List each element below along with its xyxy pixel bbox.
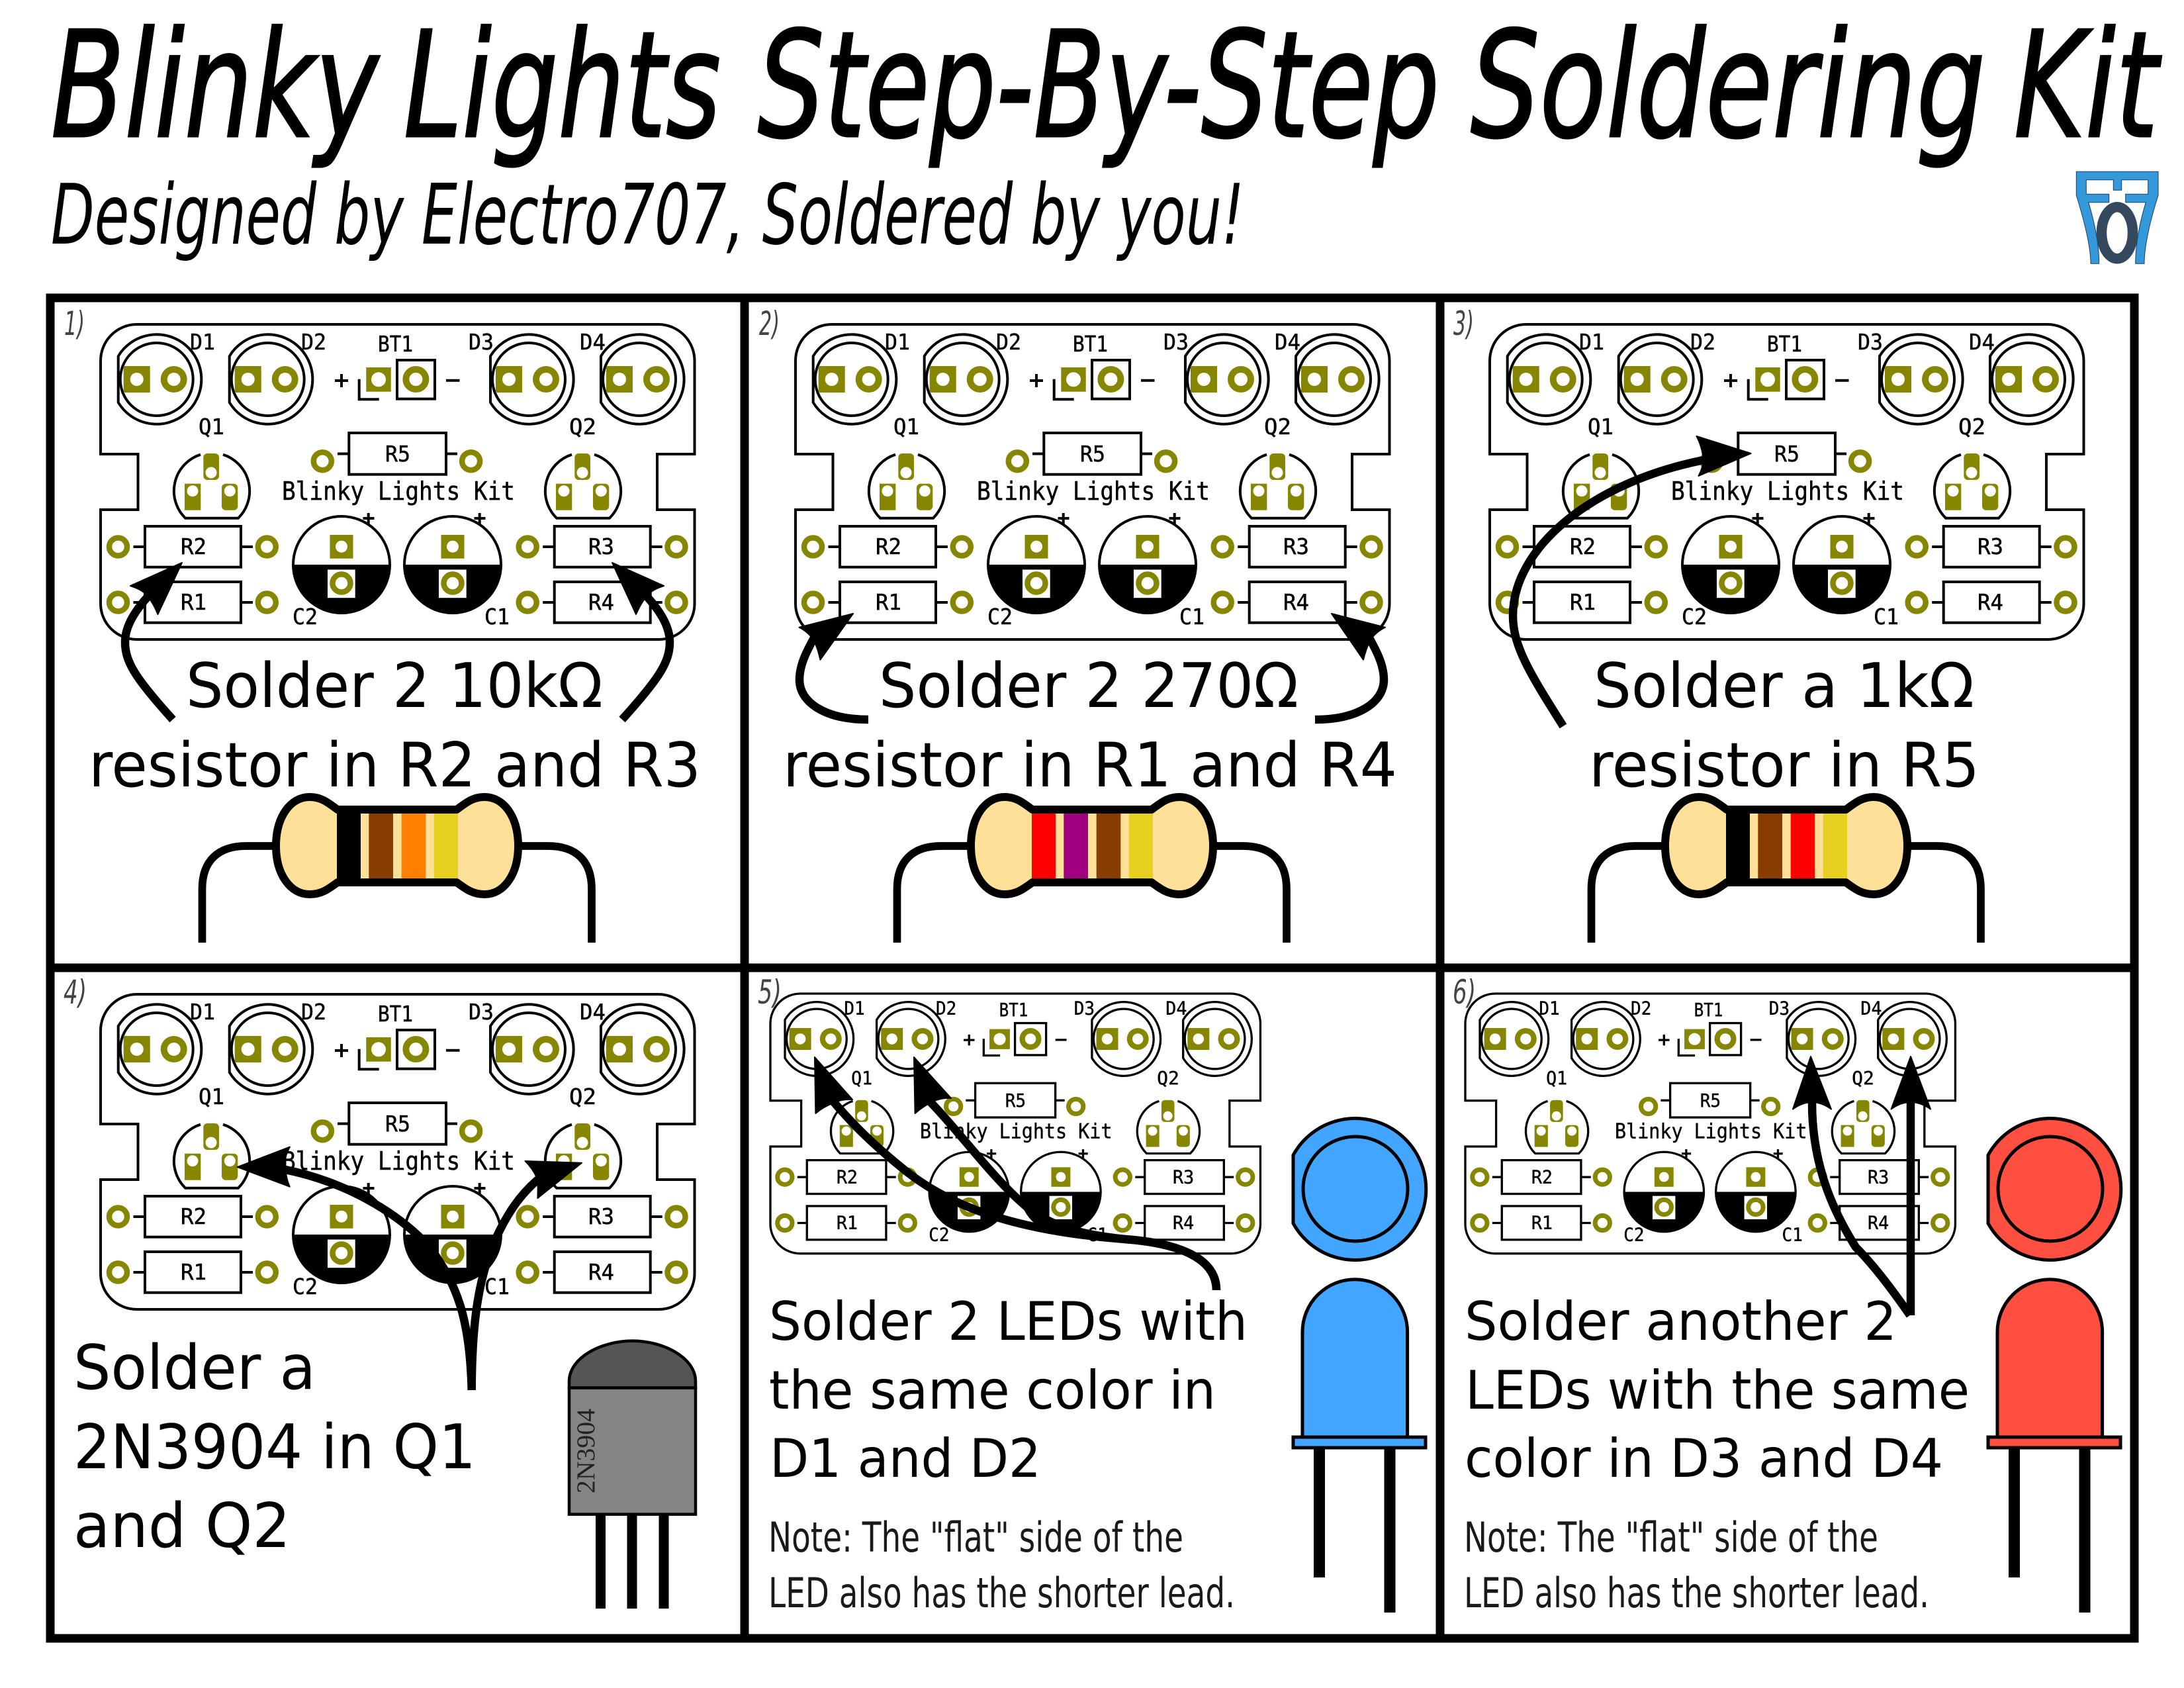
step number 3: 3)	[1453, 305, 1474, 343]
circuit board: D4	[1860, 998, 1882, 1019]
circuit board: R2	[181, 534, 206, 559]
circuit board	[101, 324, 695, 639]
circuit board: R4	[1173, 1213, 1194, 1234]
panel: step 6	[1444, 972, 2130, 1634]
circuit board: R5	[1700, 1091, 1721, 1111]
circuit board: R2	[1570, 534, 1596, 559]
step number 4: 4)	[64, 973, 87, 1011]
arrow to Q2	[472, 1161, 582, 1390]
subtitle: Designed by Electro707, Soldered by you!	[51, 166, 1244, 263]
title: Soldering	[1471, 1, 1985, 171]
circuit board: R2	[1531, 1167, 1553, 1188]
circuit board: R4	[588, 589, 614, 615]
instruction text: color in D3 and D4	[1465, 1428, 1943, 1489]
circuit board: R2	[181, 1203, 206, 1229]
circuit board: R5	[385, 441, 410, 467]
circuit board: Q2	[1264, 414, 1291, 440]
instruction text: Solder 2 10kΩ	[186, 650, 603, 722]
instruction text: Solder 2 LEDs with	[769, 1291, 1248, 1352]
panel: step 1	[54, 302, 741, 964]
circuit board: Blinky Lights Kit	[1615, 1120, 1807, 1144]
circuit board: Blinky Lights Kit	[920, 1120, 1112, 1144]
circuit board: R3	[1173, 1167, 1194, 1188]
panel: step 4	[54, 972, 741, 1634]
resistor illustration	[1591, 797, 1981, 943]
transistor illustration: 2N3904	[572, 1409, 600, 1493]
circuit board	[1465, 994, 1955, 1254]
title: Step-By-Step	[758, 1, 1439, 171]
instruction text: resistor in R1 and R4	[783, 729, 1397, 801]
circuit board: R5	[1005, 1091, 1026, 1111]
instruction text: Solder a 1kΩ	[1594, 650, 1974, 722]
circuit board: D3	[469, 329, 494, 355]
circuit board: Q2	[569, 414, 596, 440]
panel grid frame	[50, 298, 2134, 1638]
circuit board: Q2	[569, 1084, 596, 1109]
circuit board: Q1	[893, 414, 919, 440]
circuit board: BT1	[378, 1001, 413, 1027]
panel: step 3	[1444, 302, 2130, 964]
LED top view	[1293, 1119, 1426, 1260]
circuit board: C2	[293, 604, 318, 630]
circuit board: R4	[588, 1259, 614, 1285]
circuit board: R1	[837, 1213, 858, 1234]
circuit board: R1	[181, 589, 206, 615]
LED side view	[1293, 1280, 1426, 1613]
circuit board: R1	[181, 1259, 206, 1285]
note text: Note: The "flat" side of the	[1464, 1513, 1878, 1562]
instruction text: LEDs with the same	[1465, 1360, 1970, 1421]
instruction text: Solder another 2	[1465, 1291, 1897, 1352]
circuit board: R3	[1283, 534, 1309, 559]
title: Blinky	[51, 1, 380, 171]
transistor illustration	[569, 1341, 696, 1609]
circuit board: D2	[301, 999, 326, 1025]
circuit board: D3	[1769, 998, 1790, 1019]
circuit board: D2	[301, 329, 326, 355]
resistor illustration	[897, 797, 1287, 943]
circuit board: D3	[1163, 329, 1189, 355]
instruction text	[1589, 650, 1979, 801]
circuit board: D4	[580, 329, 606, 355]
LED side view	[1988, 1280, 2120, 1613]
circuit board: BT1	[1767, 331, 1802, 357]
circuit board: R3	[588, 1203, 614, 1229]
circuit board: D4	[1275, 329, 1300, 355]
circuit board: D2	[996, 329, 1021, 355]
circuit board: R2	[837, 1167, 858, 1188]
circuit board: R3	[588, 534, 614, 559]
note text: LED also has the shorter lead.	[1464, 1569, 1929, 1617]
circuit board: BT1	[1694, 1000, 1723, 1021]
arrow to D2	[914, 1057, 1216, 1290]
circuit board: C1	[1179, 604, 1205, 630]
instruction text: Solder a	[73, 1332, 316, 1403]
title: Lights	[404, 1, 721, 171]
step number 1: 1)	[64, 305, 85, 343]
circuit board: D4	[580, 999, 606, 1025]
circuit board: D1	[844, 998, 865, 1019]
circuit board: D3	[469, 999, 494, 1025]
circuit board: D3	[1074, 998, 1095, 1019]
circuit board: BT1	[999, 1000, 1028, 1021]
circuit board: R4	[1283, 589, 1309, 615]
instruction text: and Q2	[73, 1490, 291, 1562]
circuit board: C1	[1087, 1225, 1108, 1246]
circuit board: Q1	[1546, 1068, 1567, 1089]
circuit board: C1	[1782, 1225, 1803, 1246]
circuit board: C2	[987, 604, 1013, 630]
note text	[1464, 1513, 1929, 1617]
circuit board: C2	[929, 1225, 950, 1246]
circuit board: Q1	[851, 1068, 872, 1089]
instruction text	[89, 650, 701, 801]
instruction text	[73, 1332, 476, 1562]
circuit board: D4	[1969, 329, 1995, 355]
circuit board: C2	[1682, 604, 1707, 630]
note text: LED also has the shorter lead.	[768, 1569, 1235, 1617]
instruction text: resistor in R2 and R3	[89, 729, 701, 801]
arrow to R1	[799, 614, 868, 720]
note text	[768, 1513, 1235, 1617]
arrow to D3	[1793, 1056, 1910, 1315]
circuit board: R1	[1531, 1213, 1553, 1234]
circuit board: R4	[1868, 1213, 1889, 1234]
circuit board: R3	[1868, 1167, 1889, 1188]
arrow to R5	[1513, 436, 1751, 726]
circuit board: C2	[1623, 1225, 1645, 1246]
panel: step 2	[749, 302, 1435, 964]
circuit board: R1	[876, 589, 901, 615]
circuit board: D2	[936, 998, 956, 1019]
circuit board: Blinky Lights Kit	[1671, 477, 1904, 506]
instruction text: the same color in	[769, 1360, 1216, 1421]
circuit board: D3	[1858, 329, 1883, 355]
circuit board	[796, 324, 1390, 639]
circuit board: C1	[484, 604, 510, 630]
circuit board: BT1	[378, 331, 413, 357]
circuit board: Q2	[1852, 1068, 1874, 1089]
arrow to D1	[815, 1057, 1216, 1290]
arrow to Q1	[238, 1147, 472, 1390]
instruction text	[769, 1291, 1248, 1489]
arrow to R4	[1315, 614, 1385, 720]
circuit board: Q1	[199, 414, 224, 440]
instruction text	[783, 650, 1397, 801]
circuit board: Blinky Lights Kit	[977, 477, 1210, 506]
icon: Electro707 logo	[2076, 171, 2158, 263]
step number 5: 5)	[758, 973, 782, 1011]
circuit board: D1	[190, 999, 215, 1025]
resistor illustration	[203, 797, 592, 943]
arrow to D4	[1891, 1056, 1931, 1315]
note text: Note: The "flat" side of the	[768, 1513, 1183, 1562]
circuit board: C1	[484, 1274, 510, 1299]
circuit board: D1	[1539, 998, 1560, 1019]
circuit board: BT1	[1073, 331, 1108, 357]
circuit board: R4	[1978, 589, 2003, 615]
circuit board: D4	[1165, 998, 1187, 1019]
circuit board: Blinky Lights Kit	[282, 477, 515, 506]
circuit board: Q2	[1157, 1068, 1179, 1089]
circuit board: R3	[1978, 534, 2003, 559]
instruction text: 2N3904 in Q1	[73, 1411, 476, 1483]
title	[51, 1, 2161, 171]
step number 6: 6)	[1453, 973, 1476, 1011]
circuit board: C2	[293, 1274, 318, 1299]
circuit board	[1490, 324, 2083, 639]
circuit board: D1	[885, 329, 910, 355]
arrow to R3	[612, 563, 670, 720]
circuit board: Q2	[1958, 414, 1985, 440]
instruction text: D1 and D2	[770, 1428, 1041, 1489]
circuit board: R5	[385, 1111, 410, 1137]
circuit board: Blinky Lights Kit	[282, 1147, 515, 1176]
circuit board: Q1	[1588, 414, 1614, 440]
circuit board: D1	[190, 329, 215, 355]
LED top view	[1988, 1119, 2121, 1260]
panel: step 5	[749, 972, 1435, 1634]
circuit board: R5	[1774, 441, 1799, 467]
circuit board: D1	[1579, 329, 1604, 355]
circuit board: D2	[1690, 329, 1715, 355]
circuit board: R1	[1570, 589, 1596, 615]
circuit board: Q1	[199, 1084, 224, 1109]
circuit board: R5	[1080, 441, 1105, 467]
instruction text: resistor in R5	[1589, 729, 1979, 801]
circuit board	[770, 994, 1260, 1254]
circuit board: C1	[1874, 604, 1899, 630]
step number 2: 2)	[759, 305, 780, 343]
instruction text: Solder 2 270Ω	[879, 650, 1298, 722]
arrow to R2	[125, 563, 182, 720]
instruction text	[1465, 1291, 1970, 1489]
circuit board	[101, 994, 695, 1309]
circuit board: R2	[876, 534, 901, 559]
circuit board: D2	[1631, 998, 1651, 1019]
